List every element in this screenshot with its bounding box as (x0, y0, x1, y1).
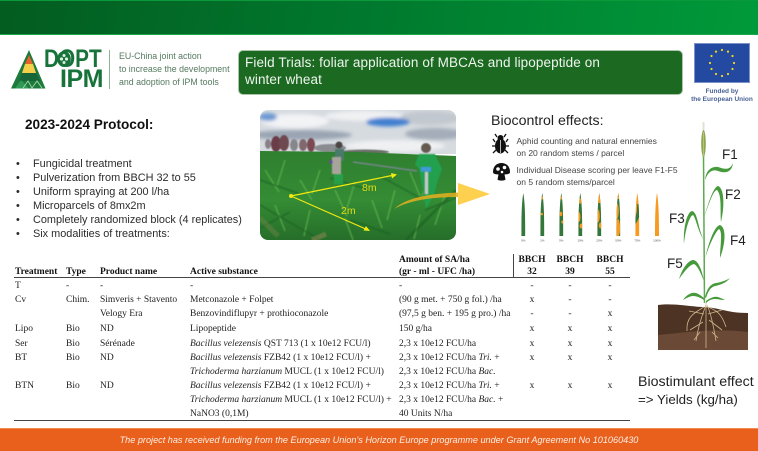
row Lipo: x (530, 324, 534, 334)
protocol bullet list: Uniform spraying at 200 l/ha (33, 186, 169, 198)
aphid counting text: Aphid counting and natural ennemies (516, 136, 657, 146)
row Lipo (15, 324, 612, 334)
row BT: x (608, 353, 612, 363)
row BT: Bio (66, 353, 80, 363)
row Cv: Velogy Era (100, 309, 142, 319)
protocol bullet list: • (16, 200, 20, 212)
treatments table (14, 254, 630, 421)
row Ser (15, 339, 612, 349)
leaf label F1: F1 (722, 147, 738, 162)
row Ser: Sérénade (100, 339, 135, 349)
row BT: ND (100, 353, 114, 363)
leaf 0% (521, 193, 526, 242)
row Cv: (90 g met. + 750 g fol.) /ha (399, 295, 502, 305)
row BT: BT (15, 353, 27, 363)
logo tagline (119, 51, 230, 87)
aphid counting text: on 20 random stems / parcel (516, 148, 624, 158)
table header: Active substance (190, 267, 258, 277)
table header: Type (66, 267, 86, 277)
leaf label F3: F3 (669, 211, 685, 226)
row BTN: Bacillus velezensis FZB42 (1 x 10e12 FCU/l) + (190, 381, 371, 391)
row Cv: Simveris + Stavento (100, 295, 177, 305)
row BT: 2,3 x 10e12 FCU/ha Bac. (399, 367, 496, 377)
roots (687, 303, 726, 348)
row BT: Trichoderma harzianum MUCL (1 x 10e12 FCU/l) (190, 367, 384, 377)
leaf 10% (578, 193, 584, 242)
sprayer boom (353, 162, 417, 171)
row T: - (100, 281, 103, 291)
operator right (415, 143, 442, 209)
logo wordmark DOPT: DOPT (44, 44, 101, 72)
row Ser: Bio (66, 339, 80, 349)
row BTN: x (568, 381, 572, 391)
leaf 5%: 5% (559, 238, 564, 242)
icon: EU flag (694, 43, 750, 83)
title banner: winter wheat (245, 72, 322, 87)
row Ser: x (608, 339, 612, 349)
row BTN: x (530, 381, 534, 391)
leaf 25%: 25% (596, 238, 603, 242)
protocol bullet list: Fungicidal treatment (33, 158, 132, 170)
row BTN: 40 Units N/ha (399, 409, 452, 419)
row Cv: Chim. (66, 295, 90, 305)
protocol bullet list: Microparcels of 8mx2m (33, 200, 146, 212)
row BTN (15, 381, 612, 419)
protocol bullet list: • (16, 186, 20, 198)
row Cv: - (568, 309, 572, 319)
wheat plant with leaves and roots (658, 122, 748, 350)
top green banner (0, 0, 758, 35)
row BTN: Bio (66, 381, 80, 391)
funded by caption (691, 88, 753, 103)
protocol bullet list: • (16, 172, 20, 184)
row Lipo: Lipopeptide (190, 324, 236, 334)
row BT: x (568, 353, 572, 363)
row T: - (399, 281, 402, 291)
biocontrol heading: Biocontrol effects: (491, 113, 604, 129)
funded by caption: the European Union (691, 96, 753, 103)
leaf 50%: 50% (615, 238, 622, 242)
row BTN: 2,3 x 10e12 FCU/ha Tri. + (399, 381, 500, 391)
leaf 5% (559, 193, 564, 242)
leaf F2 (704, 186, 723, 222)
row Lipo: x (568, 324, 572, 334)
table header: (gr - ml - UFC /ha) (399, 267, 475, 277)
row Lipo: x (608, 324, 612, 334)
row Cv: x (530, 295, 534, 305)
operator left (329, 142, 344, 184)
leaf 1%: 1% (540, 238, 545, 242)
basal leaves (683, 278, 730, 303)
row Ser: 2,3 x 10e12 FCU/ha (399, 339, 476, 349)
leaf F1 (705, 163, 733, 180)
protocol bullet list: • (16, 214, 20, 226)
logo wordmark IPM: IPM (60, 65, 103, 93)
protocol heading: 2023-2024 Protocol: (25, 117, 153, 132)
label 8m: 8m (362, 182, 377, 194)
row BTN: 2,3 x 10e12 FCU/ha Bac. + (399, 395, 503, 405)
aphid counting text (516, 136, 657, 158)
leaf 75%: 75% (634, 238, 641, 242)
biostimulant effect text (638, 374, 754, 407)
row T: - (530, 281, 534, 291)
row Cv: x (608, 309, 612, 319)
field photo with plot dimensions (260, 110, 490, 240)
row Lipo: 150 g/ha (399, 324, 432, 334)
row Cv: Metconazole + Folpet (190, 295, 273, 305)
leaf 100%: 100% (653, 238, 661, 242)
leaf 50% (615, 193, 622, 242)
row BTN: ND (100, 381, 114, 391)
leaf disease severity scale (521, 193, 661, 242)
row T: - (568, 281, 572, 291)
leaf 1% (540, 193, 544, 242)
table header: BBCH (519, 255, 545, 265)
row BTN: NaNO3 (0,1M) (190, 409, 249, 419)
leaf F5 (679, 260, 704, 281)
footer funding banner: The project has received funding from the European Union's Horizon Europe programme under Grant Agreement No 101060430 (120, 435, 638, 445)
row BT: x (530, 353, 534, 363)
row Lipo: ND (100, 324, 114, 334)
logo divider (109, 50, 110, 89)
table header: Product name (100, 267, 157, 277)
row Cv: Cv (15, 295, 26, 305)
protocol bullet list: • (16, 158, 20, 170)
disease scoring text: Individual Disease scoring per leave F1-F5 (516, 165, 678, 175)
label 2m: 2m (341, 205, 356, 217)
row Lipo: Lipo (15, 324, 33, 334)
icon: aphid beetle (492, 134, 509, 154)
title banner (238, 50, 683, 95)
funded by caption: Funded by (706, 88, 738, 94)
icon: ladybird inside the O (58, 51, 71, 67)
biostimulant effect text: => Yields (kg/ha) (638, 392, 738, 407)
yellow plot dimension lines (289, 173, 397, 231)
leaf label F4: F4 (730, 233, 746, 248)
row BT: Bacillus velezensis FZB42 (1 x 10e12 FCU/l) + (190, 353, 371, 363)
logo tagline: EU-China joint action (119, 51, 202, 61)
logo tagline: and adoption of IPM tools (119, 77, 219, 87)
row T: - (190, 281, 193, 291)
stem (704, 155, 705, 303)
leaf 0%: 0% (521, 238, 526, 242)
table header (15, 255, 624, 277)
table header: Treatment (15, 267, 57, 277)
logo tagline: to increase the development (119, 64, 230, 74)
row Ser: Bacillus velezensis QST 713 (1 x 10e12 FCU/l) (190, 339, 371, 349)
row BTN: x (608, 381, 612, 391)
row Cv: - (568, 295, 572, 305)
table header: 55 (605, 267, 615, 277)
row Lipo: Bio (66, 324, 80, 334)
protocol bullet list: Six modalities of treatments: (33, 228, 170, 240)
protocol bullet list: Pulverization from BBCH 32 to 55 (33, 172, 196, 184)
row T: T (15, 281, 21, 291)
title banner: Field Trials: foliar application of MBCAs and lipopeptide on (245, 55, 600, 70)
disease scoring text: on 5 random stems/parcel (516, 176, 615, 186)
row BTN: Trichoderma harzianum MUCL (1 x 10e12 FCU/l) + (190, 395, 392, 405)
row Cv: Benzovindiflupyr + prothioconazole (190, 309, 328, 319)
disease scoring text (516, 165, 678, 186)
icon: logo triangle (11, 50, 46, 89)
protocol bullet list: Completely randomized block (4 replicates) (33, 214, 242, 226)
row BTN: BTN (15, 381, 34, 391)
row T: - (608, 281, 612, 291)
leaf F4 (705, 225, 725, 259)
table header: BBCH (597, 255, 623, 265)
biostimulant effect text: Biostimulant effect (638, 374, 754, 390)
protocol bullet list: • (16, 228, 20, 240)
row Ser: Ser (15, 339, 28, 349)
table header: 32 (527, 267, 537, 277)
ADOPT IPM logo (11, 44, 230, 93)
leaf 75% (634, 190, 641, 242)
EU funding emblem (691, 43, 753, 103)
row BT (15, 353, 612, 377)
row Ser: x (568, 339, 572, 349)
leaf 25% (596, 193, 602, 242)
row Cv: (97,5 g ben. + 195 g pro.) /ha (399, 309, 510, 319)
table rules (14, 277, 630, 278)
row Cv (15, 295, 612, 319)
row Cv: - (530, 309, 534, 319)
row T (15, 281, 612, 291)
table header: BBCH (557, 255, 583, 265)
leaf F3 (684, 211, 704, 244)
row BT: 2,3 x 10e12 FCU/ha Tri. + (399, 353, 500, 363)
leaf 100% (653, 190, 661, 242)
row Ser: x (530, 339, 534, 349)
table header: 39 (565, 267, 575, 277)
arrow: photo to effects (394, 183, 490, 209)
row Cv: - (608, 295, 612, 305)
row T: - (66, 281, 69, 291)
table header: Amount of SA/ha (399, 255, 470, 265)
leaf label F5: F5 (667, 256, 683, 271)
wheat ear (701, 122, 706, 157)
icon: mushroom (493, 163, 510, 181)
footer funding banner (0, 428, 758, 451)
soil block (658, 304, 748, 350)
leaf label F2: F2 (725, 187, 741, 202)
leaf 10%: 10% (577, 238, 584, 242)
protocol bullet list (16, 158, 242, 240)
